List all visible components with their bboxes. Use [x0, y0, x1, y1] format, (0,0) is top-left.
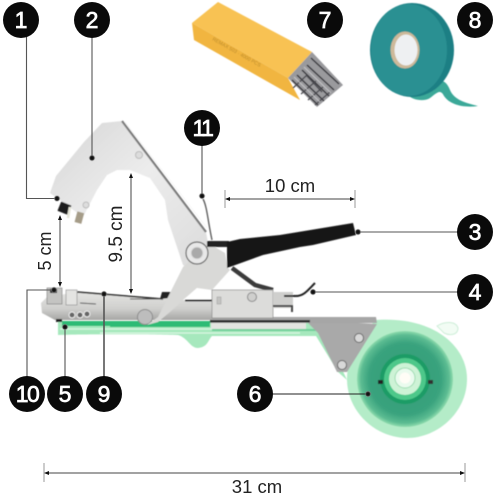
- rear housing: [212, 283, 315, 318]
- badge 5: 5: [59, 381, 71, 407]
- main body: [41, 288, 212, 324]
- badge 1: [3, 2, 39, 38]
- pivot bolt: [186, 242, 208, 264]
- badge 5: [47, 376, 83, 412]
- badge 6: 6: [249, 381, 261, 407]
- upper jaw: [50, 121, 217, 275]
- green strip under rail: [58, 322, 347, 380]
- lever arm: [147, 242, 230, 325]
- badge 6: [237, 376, 273, 412]
- coil spring: [232, 268, 273, 290]
- badge 7: [307, 2, 343, 38]
- dimension: 5 cm: 5 cm: [35, 231, 55, 271]
- badge 11: [184, 110, 220, 146]
- dimension: 9.5 cm: 9.5 cm: [106, 205, 127, 263]
- badge 9: [86, 376, 122, 412]
- dimension: 31 cm: [44, 463, 465, 497]
- product: tying tool: [41, 121, 467, 438]
- badge 2: [74, 2, 110, 38]
- badge 3: 3: [469, 219, 481, 245]
- badge 7: 7: [319, 7, 331, 33]
- dimension: 9.5 cm: [106, 173, 133, 294]
- badge 8: [457, 2, 493, 38]
- badge 8: 8: [469, 7, 481, 33]
- badge 1: 1: [15, 7, 27, 33]
- badge 4: 4: [469, 279, 482, 305]
- tape tail: [408, 81, 478, 107]
- lower rail: [210, 317, 377, 329]
- dimension: 31 cm: 31 cm: [232, 476, 282, 497]
- badge 2: 2: [86, 7, 98, 33]
- badge 10: 10: [16, 381, 39, 407]
- black handle: [207, 223, 356, 268]
- badge 9: 9: [98, 381, 110, 407]
- product: staple box: [192, 2, 343, 107]
- badge 4: [457, 274, 493, 310]
- staple stack: [288, 52, 343, 107]
- product: green tape roll: [370, 3, 478, 107]
- badge 11: 11: [193, 115, 213, 141]
- badge 10: [9, 376, 45, 412]
- wire spring 11: [203, 199, 212, 240]
- callout lines: [26, 30, 470, 394]
- box print: REMAX 503 · 4000 PCS: [211, 37, 262, 69]
- mounting plate: [308, 322, 377, 372]
- dimension: 10 cm: [225, 175, 355, 208]
- anchor dots: [52, 156, 370, 396]
- dimension: 5 cm: [35, 215, 62, 287]
- dimension: 10 cm: 10 cm: [265, 175, 315, 196]
- badge 3: [457, 214, 493, 250]
- tape reel: [347, 320, 467, 438]
